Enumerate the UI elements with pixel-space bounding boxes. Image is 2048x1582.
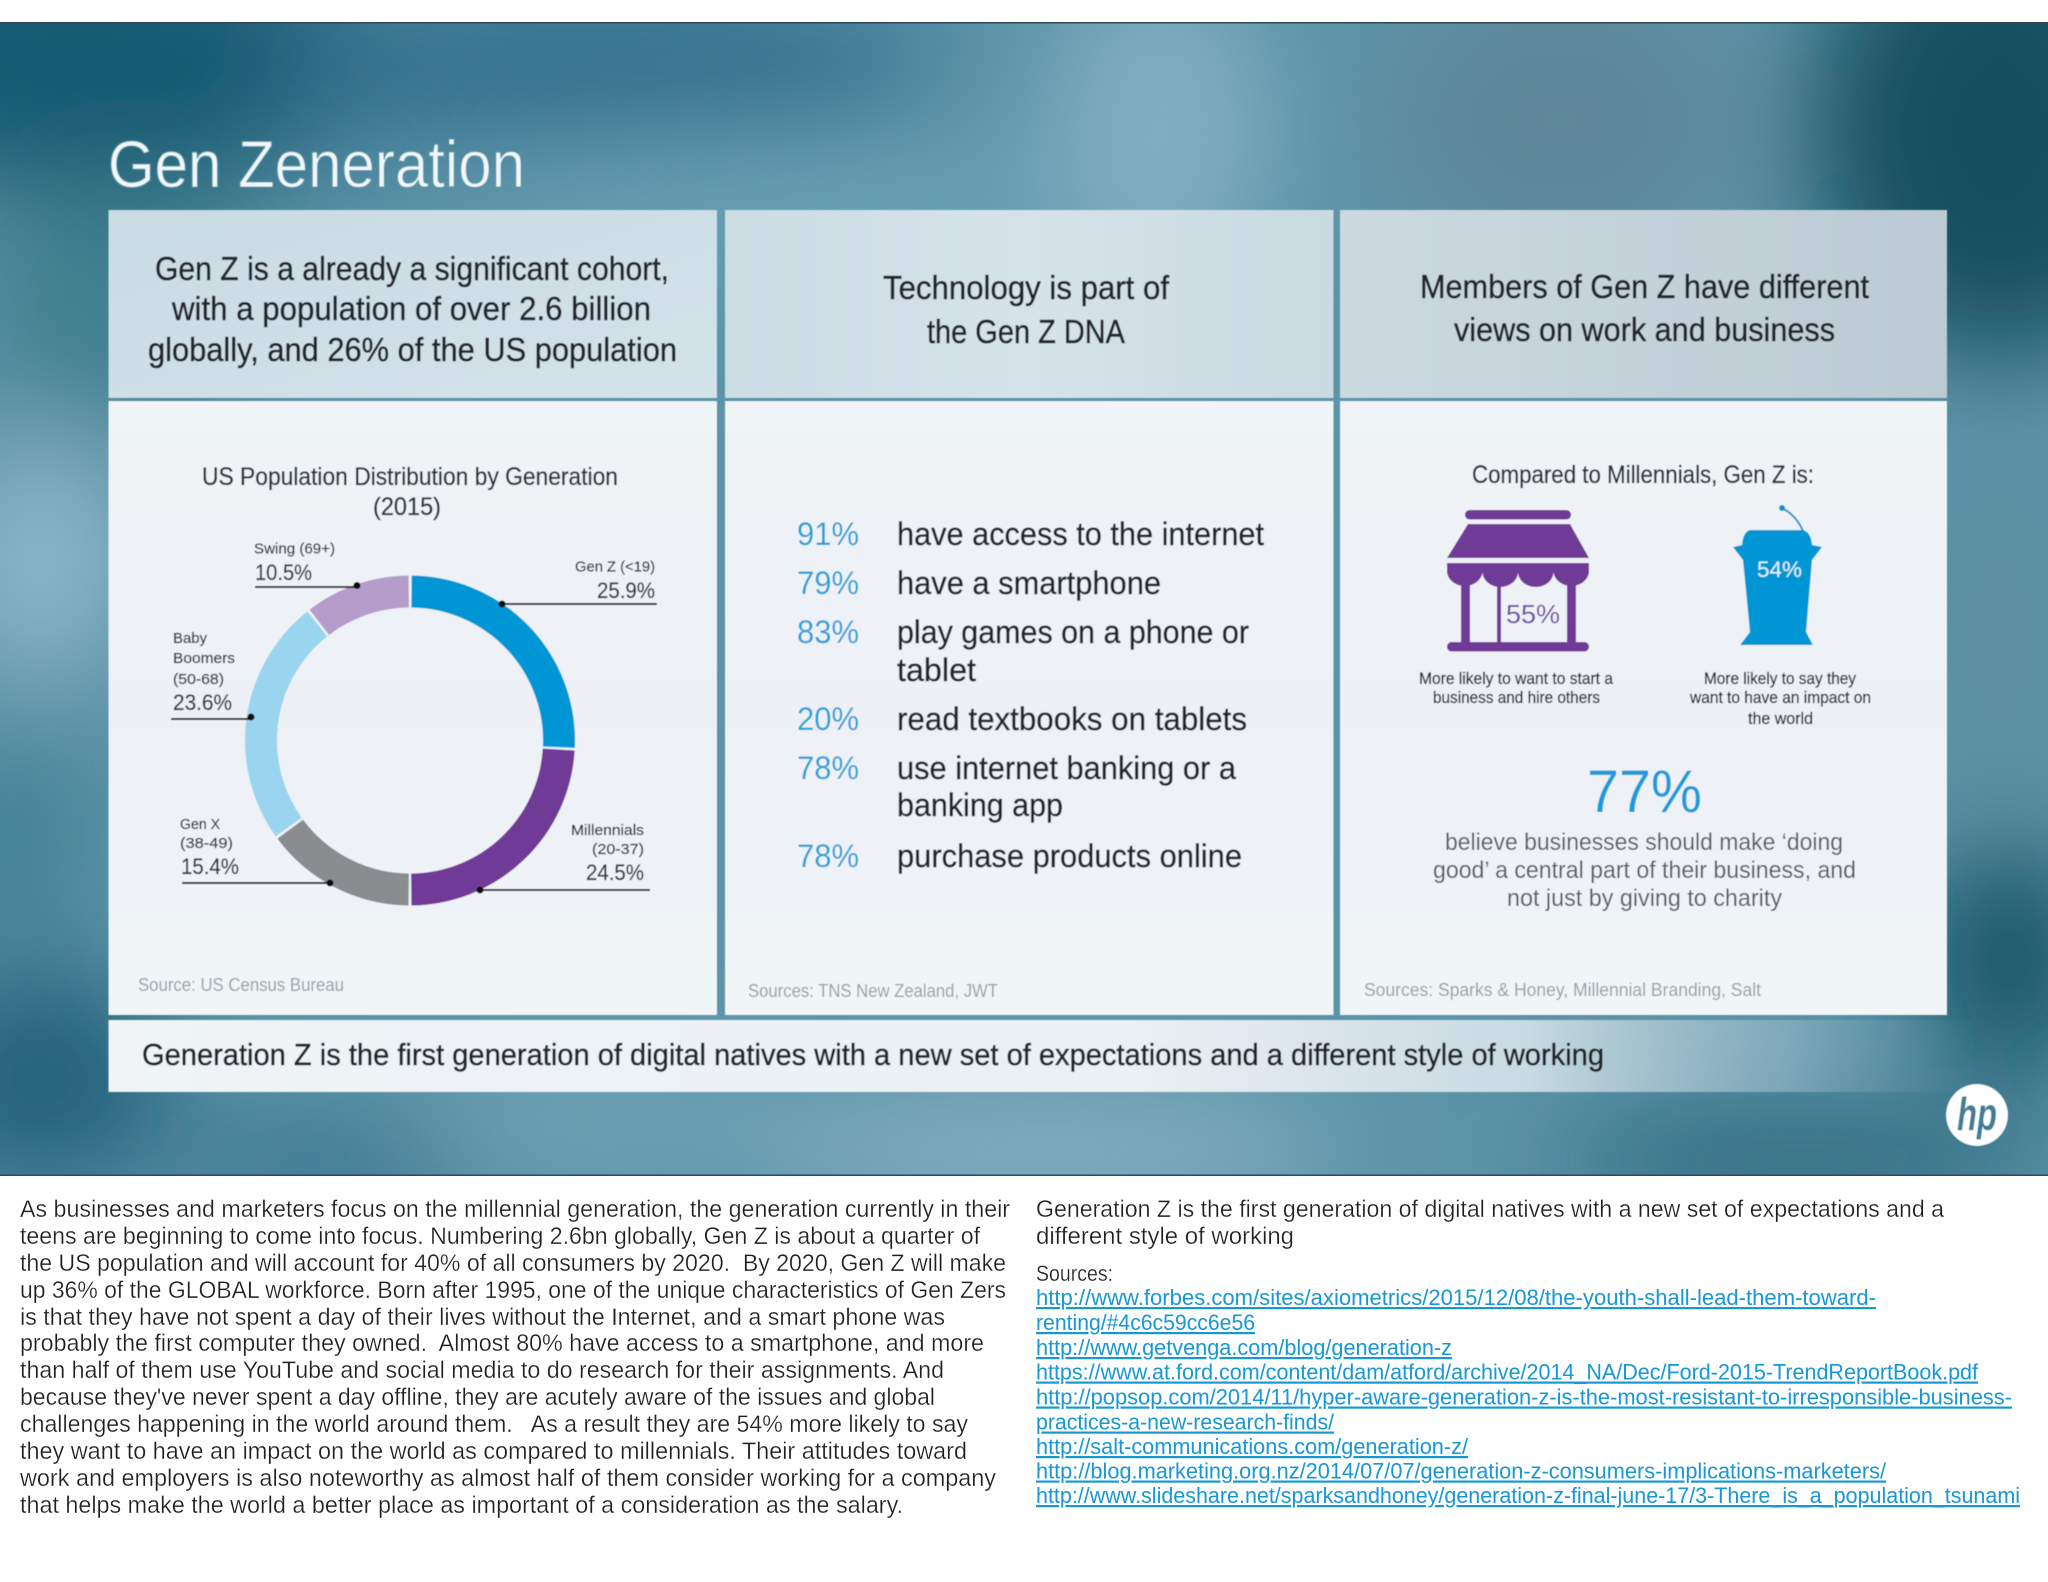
icon: podium: 54% (1757, 557, 1802, 582)
article text: that helps make the world a better place as important of a consideration as the salary. (20, 1492, 903, 1519)
label: Gen X (180, 816, 334, 886)
label: Gen X: (38-49) (180, 835, 233, 852)
header: work heading: Members of Gen Z have different (1420, 268, 1869, 305)
takeaway bar (108, 1020, 1978, 1092)
label: Gen Z (498, 558, 657, 608)
chart title (202, 463, 618, 521)
label: Baby Boomers (171, 630, 254, 720)
header: cohort heading: globally, and 26% of the US population (148, 331, 677, 368)
sources list: http://www.forbes.com/sites/axiometrics/2015/12/08/the-youth-shall-lead-them-toward- (1036, 1285, 1876, 1310)
sources list: practices-a-new-research-finds/ (1036, 1410, 1335, 1434)
summary text (1036, 1196, 1945, 1250)
caption: impact on the world: the world (1748, 709, 1813, 728)
sources list: http://salt-communications.com/generation-z/ (1036, 1434, 1469, 1459)
label: Gen X: Gen X (180, 816, 220, 833)
banner background (0, 0, 2048, 1210)
stat description: believe businesses should make ‘doing (1445, 829, 1843, 856)
stat: purchase: 78% (797, 838, 859, 874)
header: cohort heading: with a population of over 2.6 billion (171, 290, 651, 327)
panel: technology (725, 210, 1334, 1015)
caption: impact on the world: want to have an impact on (1689, 688, 1871, 707)
title: Gen Zeneration (108, 127, 525, 201)
chart title: (2015) (373, 493, 441, 521)
stat: games: tablet (897, 652, 976, 688)
icon: storefront (1447, 510, 1589, 652)
article text: challenges happening in the world around them. As a result they are 54% more likely to say (20, 1411, 968, 1438)
label: Gen X: 15.4% (181, 854, 239, 879)
chart title: US Population Distribution by Generation (202, 463, 618, 491)
caption: impact on the world (1689, 669, 1871, 728)
stat: smartphone: 79% (797, 565, 859, 601)
label: Baby Boomers: Boomers (173, 650, 235, 667)
big stat: 77%: 77% (1587, 758, 1702, 825)
summary text: different style of working (1036, 1223, 1294, 1250)
label: Millennials: 24.5% (586, 860, 644, 885)
source note: Source: US Census Bureau (138, 975, 344, 995)
stat description: not just by giving to charity (1507, 885, 1782, 912)
stat: textbooks: 20% (797, 701, 859, 737)
stat description: good’ a central part of their business, and (1433, 857, 1856, 884)
label: Gen Z: Gen Z (<19) (575, 558, 655, 576)
article text: teens are beginning to come into focus. Numbering 2.6bn globally, Gen Z is about a quarter of (20, 1223, 980, 1250)
stat description (1433, 829, 1856, 912)
header: work heading (1340, 210, 1947, 398)
stat: games: 83% (797, 614, 859, 650)
label: Millennials: (20-37) (592, 841, 644, 858)
body: statistics list (725, 401, 1334, 1015)
label: Millennials (476, 822, 650, 894)
icon: hp logo: hp (1957, 1088, 1997, 1140)
label: Gen Z: 25.9% (597, 578, 655, 603)
stat: smartphone: have a smartphone (897, 565, 1161, 601)
banner border (0, 22, 2048, 24)
label: Swing: 10.5% (255, 560, 312, 585)
stat: banking: banking app (897, 787, 1063, 823)
stat: purchase: purchase products online (897, 838, 1242, 874)
stat: internet: 91% (797, 516, 859, 552)
sources list: Sources: (1036, 1261, 1113, 1286)
stat: banking (797, 750, 1236, 823)
stat: games: play games on a phone or (897, 614, 1249, 650)
sources list: renting/#4c6c59cc6e56 (1036, 1310, 1255, 1335)
caption: start a business: More likely to want to start a (1419, 669, 1613, 688)
source note: Sources: TNS New Zealand, JWT (748, 981, 998, 1001)
body: comparison (1340, 401, 1947, 1015)
stat: games (797, 614, 1249, 688)
icon: storefront: 55% (1506, 599, 1560, 629)
caption: impact on the world: More likely to say they (1704, 669, 1856, 688)
stat: internet: have access to the internet (897, 516, 1264, 552)
article text: is that they have not spent a day of their lives without the Internet, and a smart phone was (20, 1304, 945, 1331)
sources list: http://popsop.com/2014/11/hyper-aware-generation-z-is-the-most-resistant-to-irresponsible-business- (1036, 1384, 2012, 1410)
article text: up 36% of the GLOBAL workforce. Born after 1995, one of the unique characteristics of Gen Zers (20, 1277, 1006, 1304)
panel: population cohort (108, 210, 717, 1015)
stat: textbooks: read textbooks on tablets (897, 701, 1247, 737)
sources list: https://www.at.ford.com/content/dam/atford/archive/2014_NA/Dec/Ford-2015-TrendReportBook.pdf (1036, 1360, 1979, 1384)
article text: because they've never spent a day offline, they are acutely aware of the issues and global (20, 1384, 935, 1411)
article text: As businesses and marketers focus on the millennial generation, the generation currently in their (20, 1196, 1010, 1223)
label: Baby Boomers: 23.6% (173, 690, 232, 715)
sources list (1036, 1261, 2020, 1508)
summary text: Generation Z is the first generation of digital natives with a new set of expectations and a (1036, 1196, 1945, 1223)
icon: hp logo (1946, 1084, 2008, 1146)
comparison heading: Compared to Millennials, Gen Z is: (1472, 461, 1814, 489)
article text: they want to have an impact on the world as compared to millennials. Their attitudes toward (20, 1438, 967, 1465)
stat: banking: 78% (797, 750, 859, 786)
header: technology heading: Technology is part of (883, 269, 1170, 306)
header: cohort heading: Gen Z is a already a significant cohort, (155, 250, 669, 287)
caption: start a business (1419, 669, 1613, 707)
sources list: http://blog.marketing.org.nz/2014/07/07/generation-z-consumers-implications-marketers/ (1036, 1458, 1887, 1484)
article text: the US population and will account for 40% of all consumers by 2020. By 2020, Gen Z will make (20, 1250, 1006, 1277)
caption: start a business: business and hire others (1433, 688, 1600, 707)
label: Baby Boomers: (50-68) (173, 671, 224, 688)
header: technology heading: the Gen Z DNA (927, 313, 1125, 350)
label: Millennials: Millennials (571, 822, 644, 839)
label: Baby Boomers: Baby (173, 630, 207, 647)
panel: work and business (1340, 210, 1947, 1015)
source note: Sources: Sparks & Honey, Millennial Branding, Salt (1364, 980, 1761, 1000)
sources list: http://www.slideshare.net/sparksandhoney/generation-z-final-june-17/3-There_is_a_population_tsunami (1036, 1483, 2020, 1508)
header: technology heading (725, 210, 1334, 398)
stat: banking: use internet banking or a (897, 750, 1236, 786)
label: Swing (254, 540, 360, 589)
icon: podium (1733, 505, 1822, 645)
takeaway bar: Generation Z is the first generation of digital natives with a new set of expectations and a different style of working (142, 1037, 1604, 1072)
sources list: http://www.getvenga.com/blog/generation-z (1036, 1335, 1452, 1360)
article text: than half of them use YouTube and social media to do research for their assignments. And (20, 1357, 944, 1384)
label: Swing: Swing (69+) (254, 540, 335, 558)
article text (19, 1196, 1010, 1519)
donut chart (261, 592, 559, 890)
body: donut panel (108, 401, 717, 1015)
header: work heading: views on work and business (1454, 311, 1835, 348)
header: cohort heading (108, 210, 717, 398)
article text: work and employers is also noteworthy as almost half of them consider working for a company (19, 1465, 996, 1492)
article text: probably the first computer they owned. Almost 80% have access to a smartphone, and more (20, 1330, 984, 1357)
